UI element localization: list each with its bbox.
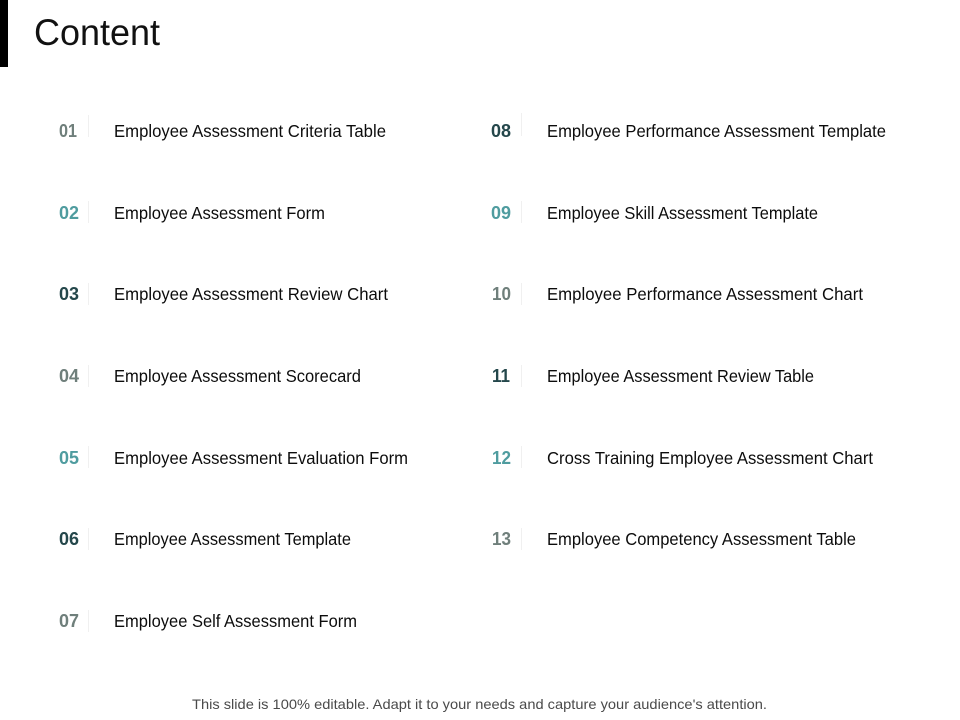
item 06: 06 <box>59 529 79 549</box>
item 07: Employee Self Assessment Form <box>114 611 357 631</box>
item 13: Employee Competency Assessment Table <box>547 529 856 549</box>
item 02: 02 <box>59 203 79 223</box>
item 10: Employee Performance Assessment Chart <box>547 284 863 304</box>
item 01: Employee Assessment Criteria Table <box>114 121 386 141</box>
title accent bar <box>0 0 8 67</box>
item 09: Employee Skill Assessment Template <box>547 203 818 223</box>
item 08: Employee Performance Assessment Template <box>547 121 886 141</box>
item 08 <box>491 113 886 141</box>
item 02: Employee Assessment Form <box>114 203 325 223</box>
item 05: 05 <box>59 448 79 468</box>
item 12: Cross Training Employee Assessment Chart <box>547 448 873 468</box>
item 06: Employee Assessment Template <box>114 529 351 549</box>
item 12: 12 <box>492 448 511 468</box>
item 07: 07 <box>59 611 79 631</box>
item 01 <box>59 115 386 141</box>
item 11: 11 <box>492 366 510 386</box>
item 08: 08 <box>491 121 511 141</box>
item 11: Employee Assessment Review Table <box>547 366 814 386</box>
item 01: 01 <box>59 121 77 141</box>
item 05: Employee Assessment Evaluation Form <box>114 448 408 468</box>
item 02 <box>59 201 325 223</box>
item 04: 04 <box>59 366 79 386</box>
right column list <box>491 113 886 550</box>
title: Content <box>34 12 161 53</box>
item 04: Employee Assessment Scorecard <box>114 366 361 386</box>
footer note: This slide is 100% editable. Adapt it to your needs and capture your audience's attention. <box>192 696 767 712</box>
item 03: Employee Assessment Review Chart <box>114 284 388 304</box>
item 10: 10 <box>492 284 511 304</box>
item 03: 03 <box>59 284 79 304</box>
item 09: 09 <box>491 203 511 223</box>
left column list <box>59 115 408 632</box>
item 13: 13 <box>492 529 511 549</box>
